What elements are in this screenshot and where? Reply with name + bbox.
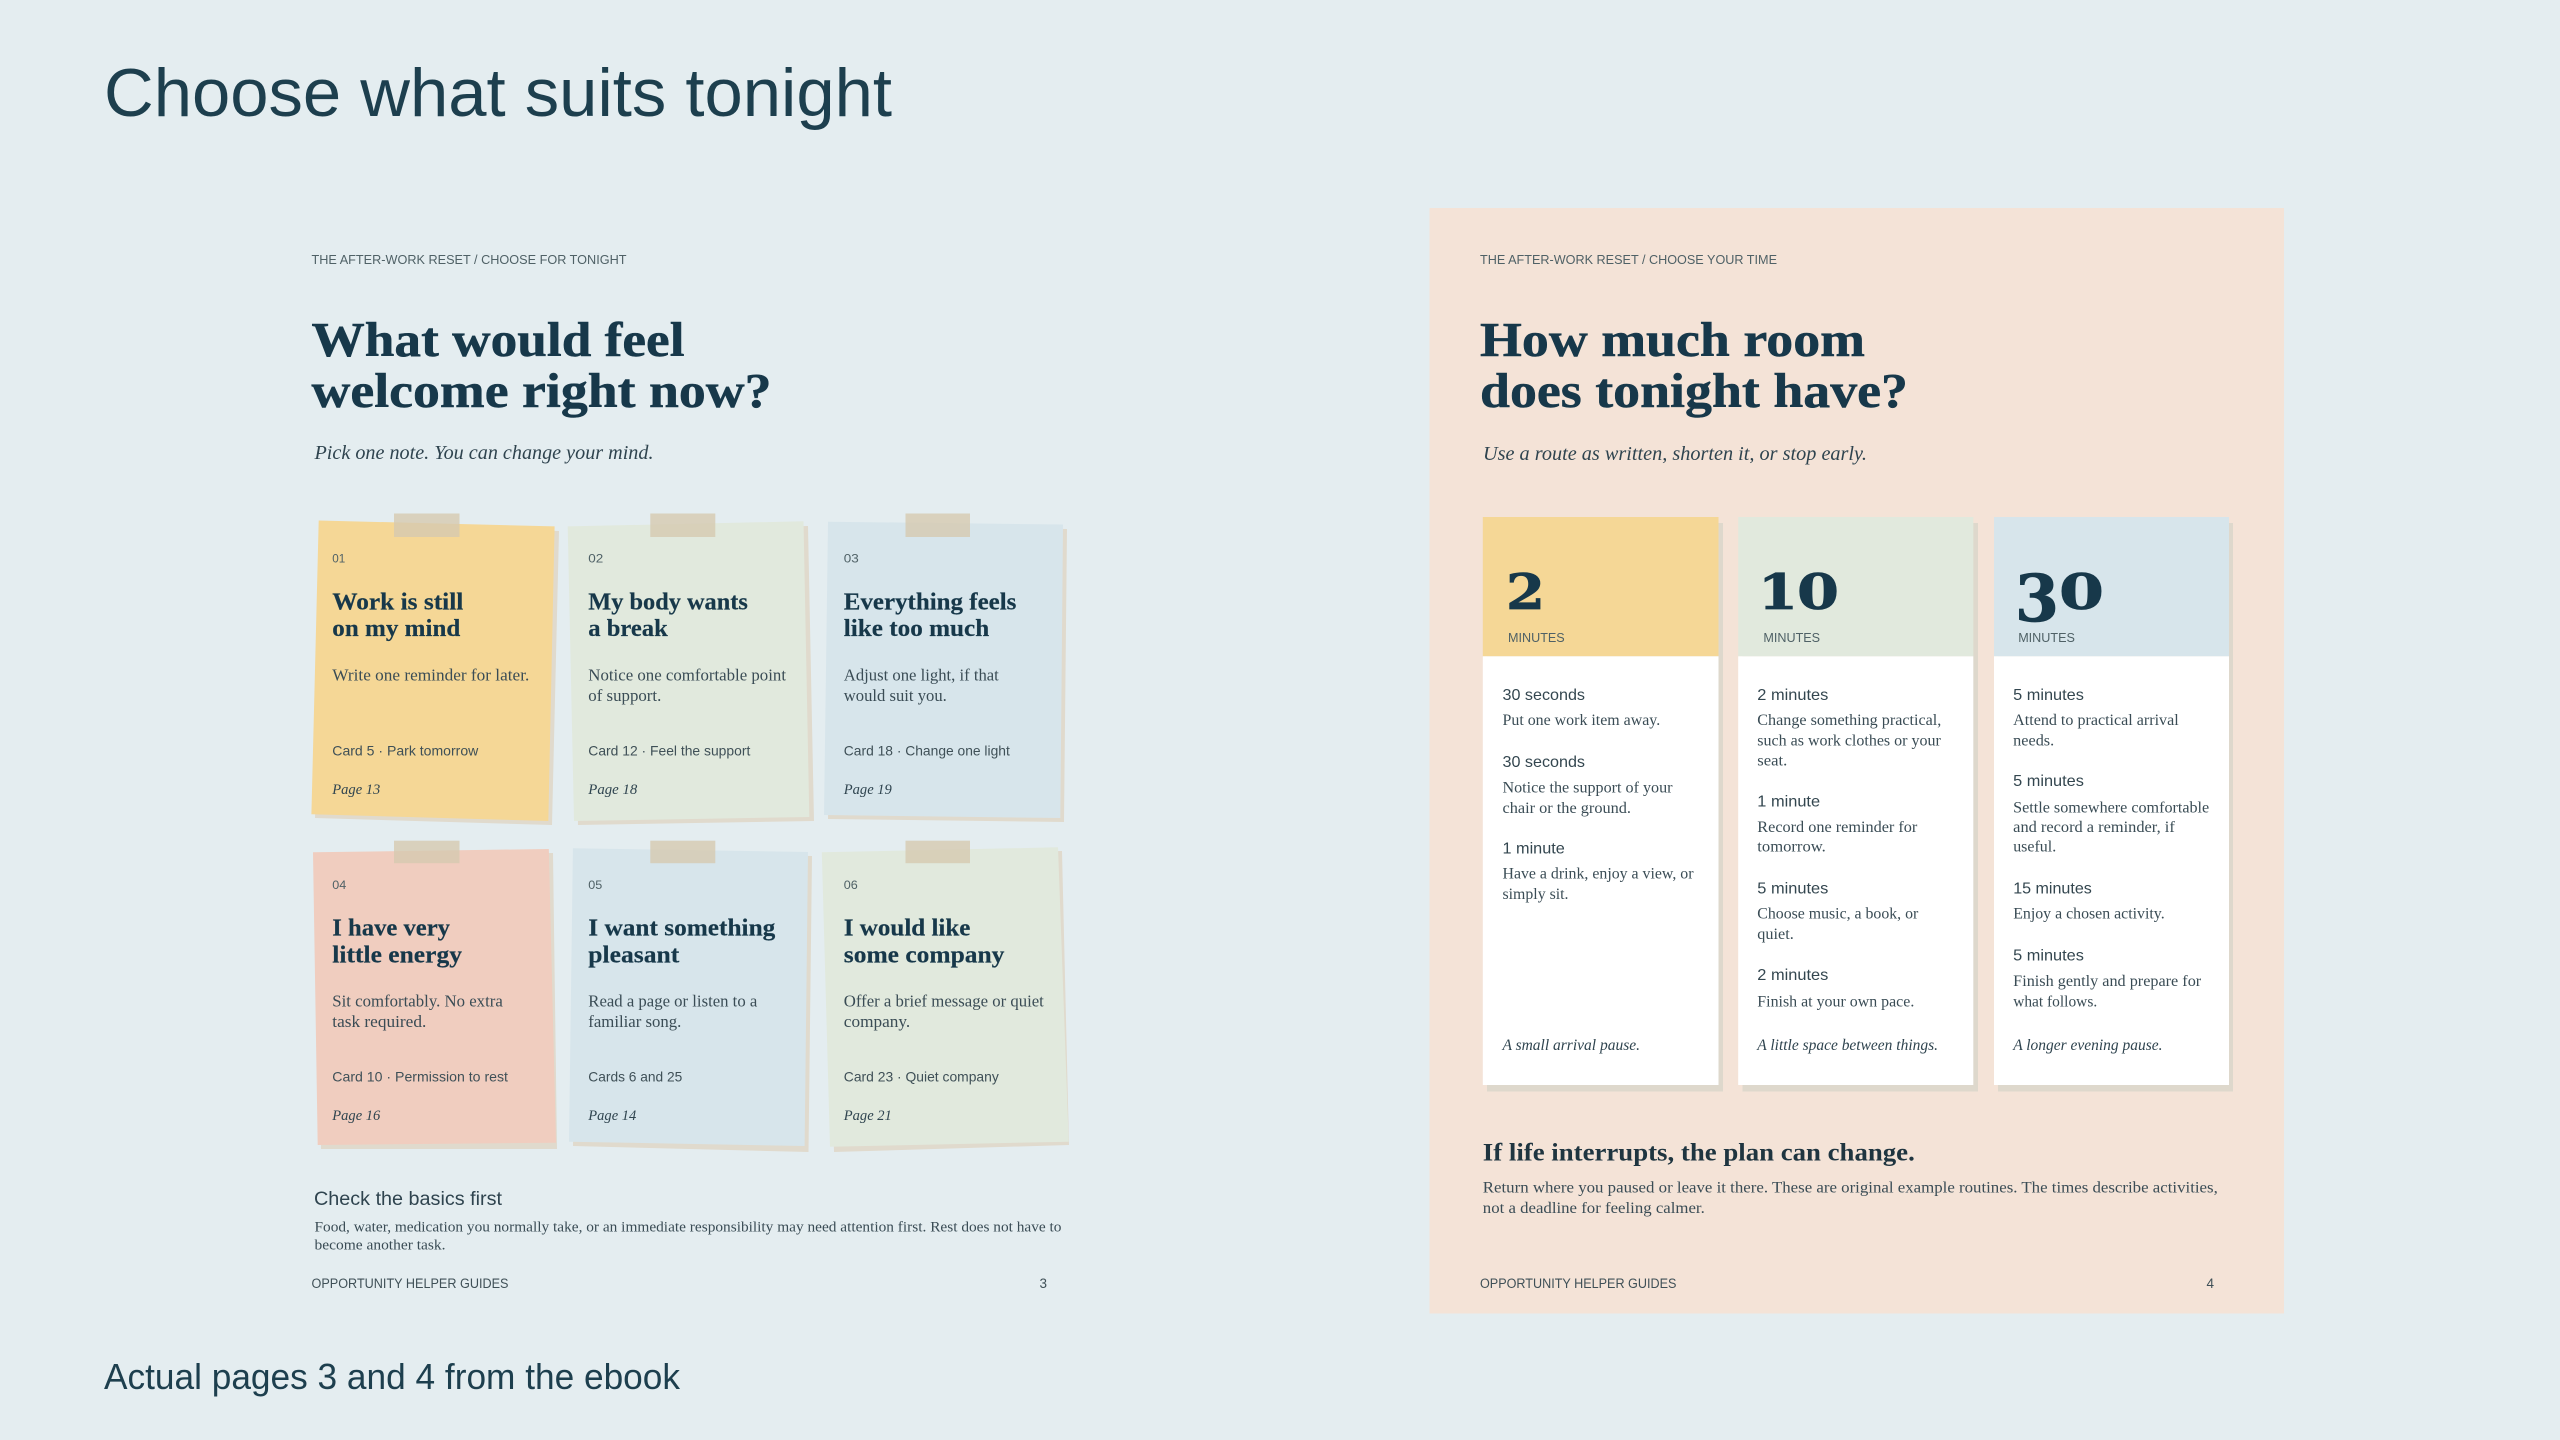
page 3 footer: 3 [1040, 1276, 1047, 1291]
note 06: 06 [844, 878, 858, 892]
card: 2 minutes: 30 seconds [1502, 754, 1585, 771]
note 03: Card 18 · Change one light [844, 742, 1010, 758]
card: 10 minutes: tomorrow. [1757, 839, 1826, 856]
card: 10 minutes: 5 minutes [1757, 880, 1828, 897]
card: 30 minutes: A longer evening pause. [2012, 1037, 2162, 1054]
card: 30 minutes: 5 minutes [2013, 773, 2084, 790]
card: 10 minutes: MINUTES [1763, 630, 1820, 645]
page 4 heading: How much room [1480, 312, 1865, 367]
card: 2 minutes: 30 seconds [1502, 687, 1585, 704]
card: 30 minutes: 0 [2059, 563, 2104, 621]
note 02: of support. [588, 686, 661, 705]
card: 30 minutes: 5 minutes [2013, 948, 2084, 965]
card: 10 minutes: Finish at your own pace. [1757, 993, 1914, 1010]
card: 30 minutes: and record a reminder, if [2013, 819, 2175, 836]
card: 30 minutes: what follows. [2013, 993, 2097, 1010]
note 05: 05 [588, 878, 603, 892]
note 06: some company [844, 942, 1004, 968]
card: 2 minutes: 2 [1506, 563, 1545, 621]
card: 10 minutes: A little space between things. [1756, 1037, 1938, 1054]
note 04: Page 16 [331, 1108, 381, 1124]
card: 30 minutes: 15 minutes [2013, 880, 2092, 897]
card: 2 minutes: chair or the ground. [1502, 800, 1631, 817]
page 4 heading: does tonight have? [1480, 363, 1908, 418]
note 03: Page 19 [843, 782, 892, 798]
card: 2 minutes: 1 minute [1502, 840, 1565, 857]
note 04: Sit comfortably. No extra [332, 992, 503, 1011]
note 06: company. [844, 1012, 910, 1031]
card: 2 minutes: simply sit. [1502, 886, 1568, 903]
note 02: My body wants [588, 590, 748, 616]
note 01: Page 13 [331, 782, 380, 798]
page 3 heading [312, 312, 772, 418]
note 05: familiar song. [588, 1012, 681, 1031]
card: 10 minutes: Change something practical, [1757, 712, 1941, 729]
card: 10 minutes: such as work clothes or your [1757, 732, 1941, 749]
note 01: Work is still [332, 590, 464, 616]
basics heading: Check the basics first [314, 1189, 503, 1210]
card: 10 minutes: 1 [1758, 563, 1798, 621]
page 3 footer [312, 1276, 1047, 1291]
note 01 [311, 514, 559, 825]
card: 30 minutes: Enjoy a chosen activity. [2013, 906, 2165, 923]
caption: Actual pages 3 and 4 from the ebook [104, 1356, 681, 1397]
basics body: Food, water, medication you normally take, or an immediate responsibility may need attention first. Rest does not have to [314, 1220, 1062, 1236]
note 04: little energy [332, 942, 462, 968]
card: 10 minutes: seat. [1757, 752, 1787, 769]
note 01: Write one reminder for later. [332, 666, 529, 685]
card: 10 minutes: 1 minute [1757, 794, 1820, 811]
card: 10 minutes: Record one reminder for [1757, 819, 1918, 836]
note 02 [568, 514, 814, 825]
card: 30 minutes [1994, 517, 2233, 1092]
note 02: Card 12 · Feel the support [588, 742, 750, 758]
card: 10 minutes: 0 [1797, 563, 1839, 621]
page 4 footer: OPPORTUNITY HELPER GUIDES [1480, 1276, 1676, 1291]
basics body [314, 1220, 1062, 1253]
card: 2 minutes: A small arrival pause. [1502, 1037, 1640, 1054]
note 05: pleasant [588, 942, 679, 968]
title: Choose what suits tonight [104, 55, 892, 131]
page 3 heading: What would feel [312, 312, 684, 367]
note 03: would suit you. [844, 686, 947, 705]
panel: page 3 [311, 252, 1069, 1291]
note 06: Offer a brief message or quiet [844, 992, 1044, 1011]
note 02: Notice one comfortable point [588, 666, 786, 685]
interruption body [1483, 1180, 2218, 1217]
card: 30 minutes: useful. [2013, 839, 2056, 856]
note 05: Page 14 [587, 1108, 637, 1124]
card: 30 minutes: Settle somewhere comfortable [2013, 800, 2209, 816]
note 04: task required. [332, 1012, 426, 1031]
interruption body: not a deadline for feeling calmer. [1483, 1200, 1705, 1217]
card: 30 minutes: MINUTES [2018, 630, 2075, 645]
note 04: Card 10 · Permission to rest [332, 1068, 508, 1084]
note 01: Card 5 · Park tomorrow [332, 742, 479, 758]
card: 10 minutes [1738, 517, 1978, 1092]
note 05 [569, 841, 812, 1152]
card: 10 minutes: Choose music, a book, or [1757, 906, 1919, 923]
basics body: become another task. [314, 1237, 446, 1253]
note 03 [824, 514, 1067, 822]
note 06: Card 23 · Quiet company [844, 1068, 999, 1084]
card: 30 minutes: 3 [2015, 561, 2059, 637]
panel: page 4 [1430, 208, 2284, 1314]
note 01: 01 [332, 552, 346, 566]
note 06: I would like [844, 916, 971, 942]
note 02: a break [588, 616, 668, 642]
interruption body: Return where you paused or leave it there. These are original example routines. The times describe activities, [1483, 1180, 2218, 1197]
note 02: Page 18 [587, 782, 638, 798]
note 04: 04 [332, 878, 347, 892]
note 03: like too much [844, 616, 989, 642]
note 04 [313, 841, 557, 1149]
card: 10 minutes: quiet. [1757, 926, 1794, 943]
note 02: 02 [588, 552, 604, 566]
card: 10 minutes: 2 minutes [1757, 687, 1828, 704]
card: 10 minutes: 2 minutes [1757, 967, 1828, 984]
page 4 eyebrow: THE AFTER-WORK RESET / CHOOSE YOUR TIME [1480, 252, 1777, 267]
card: 2 minutes [1483, 517, 1723, 1092]
page 3 subheading: Pick one note. You can change your mind. [313, 442, 654, 464]
card: 30 minutes: Attend to practical arrival [2013, 712, 2179, 729]
card: 30 minutes: Finish gently and prepare for [2013, 973, 2202, 990]
card: 30 minutes: needs. [2013, 732, 2054, 749]
interruption heading: If life interrupts, the plan can change. [1483, 1140, 1915, 1166]
card: 2 minutes: Have a drink, enjoy a view, or [1502, 866, 1694, 883]
card: 2 minutes: Notice the support of your [1502, 780, 1673, 797]
page 4 footer: 4 [2206, 1276, 2214, 1291]
note 05: I want something [588, 916, 775, 942]
card: 30 minutes: 5 minutes [2013, 687, 2084, 704]
page 4 subheading: Use a route as written, shorten it, or stop early. [1483, 443, 1867, 465]
note 01: on my mind [332, 616, 461, 642]
note 06: Page 21 [843, 1108, 892, 1124]
card: 2 minutes: MINUTES [1508, 630, 1565, 645]
page 3 eyebrow: THE AFTER-WORK RESET / CHOOSE FOR TONIGHT [312, 252, 627, 267]
page 3 heading: welcome right now? [312, 363, 772, 418]
note 06 [822, 841, 1069, 1152]
note 03: 03 [844, 552, 859, 566]
note 05: Read a page or listen to a [588, 992, 758, 1011]
page 3 footer: OPPORTUNITY HELPER GUIDES [312, 1276, 508, 1291]
card: 2 minutes: Put one work item away. [1502, 712, 1660, 729]
page 4 heading [1480, 312, 1908, 418]
page 4 footer [1480, 1276, 2214, 1291]
note 03: Adjust one light, if that [844, 666, 999, 685]
note 03: Everything feels [844, 590, 1016, 616]
note 04: I have very [332, 916, 450, 942]
note 05: Cards 6 and 25 [588, 1068, 683, 1084]
